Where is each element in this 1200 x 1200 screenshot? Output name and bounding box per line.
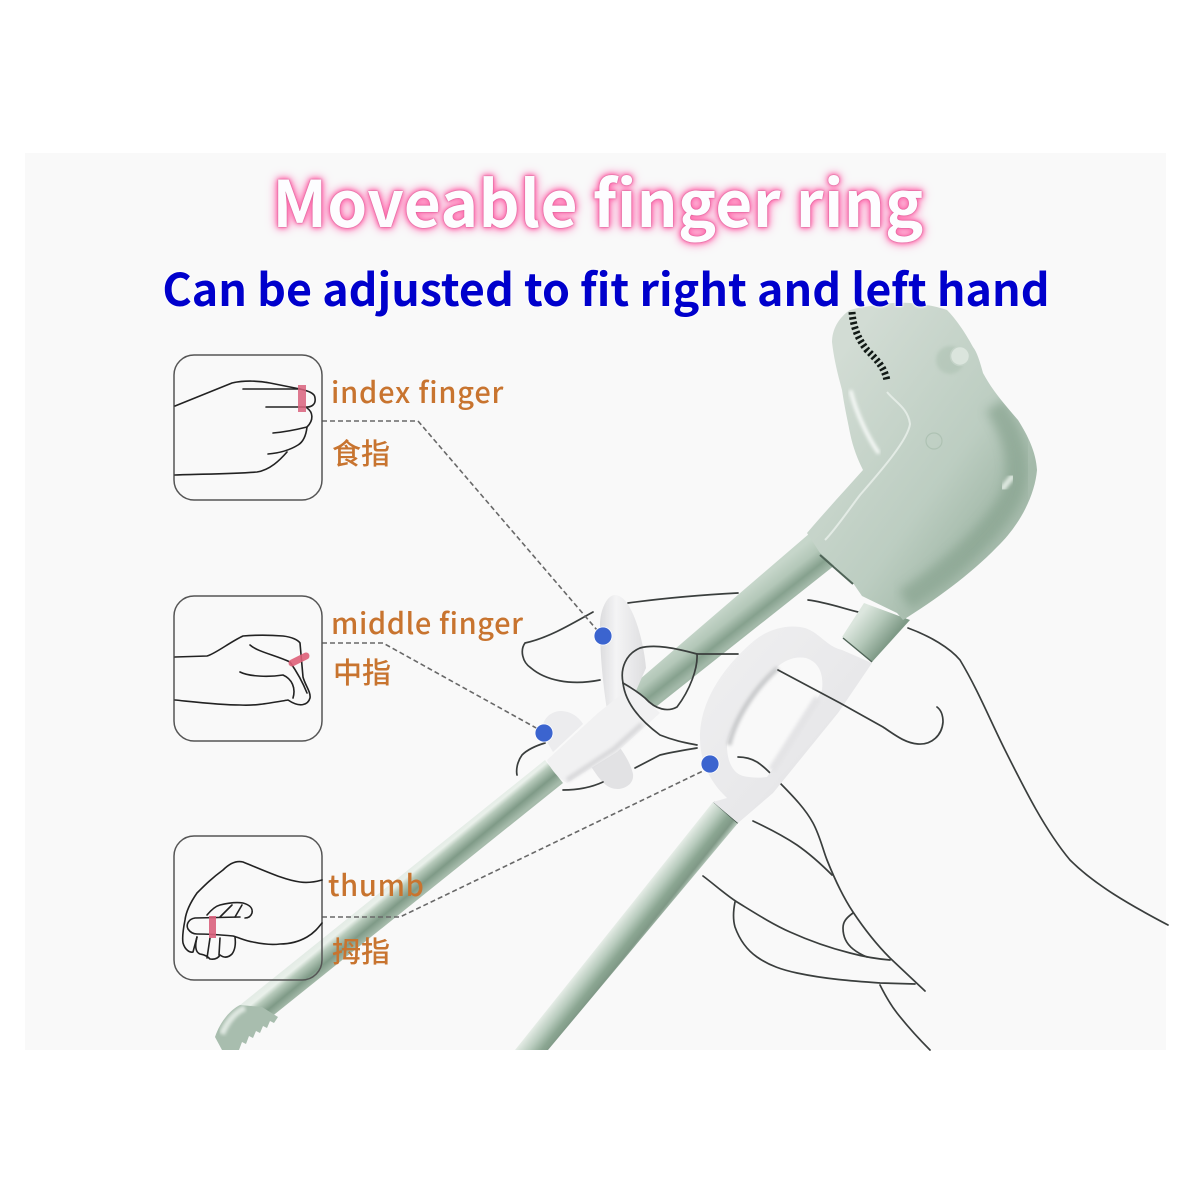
shading inside thumb ring (729, 668, 778, 745)
highlight: cheek (1003, 477, 1012, 488)
stick: lower section (240, 760, 563, 1036)
label: index finger: index finger (331, 370, 504, 412)
highlight: chin (851, 392, 878, 452)
background panel (25, 153, 1166, 1050)
dark end line upper (843, 638, 872, 662)
subtitle: Can be adjusted to fit right and left hand (162, 254, 1050, 319)
middle finger ring upper (542, 711, 583, 752)
label: thumb Chinese: 拇指 (332, 929, 390, 971)
label: middle finger Chinese: 中指 (333, 650, 391, 692)
icon: index finger hand (174, 355, 322, 500)
stick: upper section (625, 533, 835, 706)
index finger ring (600, 595, 646, 716)
upper chopstick (215, 533, 835, 1050)
stick: bottom section (515, 802, 738, 1050)
label: thumb: thumb (328, 863, 425, 905)
hand outline sketch behind chopsticks (522, 593, 1168, 1050)
marker dots (535, 627, 719, 773)
dinosaur head handle (807, 303, 1037, 620)
sleeve shading (567, 724, 642, 780)
shaded back band (905, 405, 1017, 600)
dark joint under head (820, 555, 853, 584)
dashed leader lines (322, 421, 705, 917)
title: Moveable finger ring (272, 154, 924, 246)
serrated tip (215, 1005, 278, 1050)
small finger rings and sleeve (542, 595, 660, 789)
jaw seam (825, 392, 910, 540)
label: middle finger: middle finger (331, 601, 524, 643)
head shape (807, 303, 1037, 620)
eye socket shade (936, 346, 964, 374)
nostril mark (926, 433, 942, 449)
eye (950, 346, 970, 366)
large thumb ring (700, 626, 872, 823)
dark end line lower (714, 802, 738, 823)
stick: top section (842, 603, 910, 662)
icon: middle finger hand (174, 596, 322, 741)
icon: thumb hand (174, 836, 322, 980)
label: index finger Chinese: 食指 (332, 431, 390, 473)
middle finger ring lower (590, 745, 633, 789)
inner wall of thumb ring (772, 698, 818, 770)
finger line crossing the chopstick (517, 646, 943, 790)
teeth (852, 312, 887, 381)
white sleeve (547, 686, 660, 783)
lower chopstick (515, 603, 910, 1050)
tip highlight (222, 1008, 245, 1034)
